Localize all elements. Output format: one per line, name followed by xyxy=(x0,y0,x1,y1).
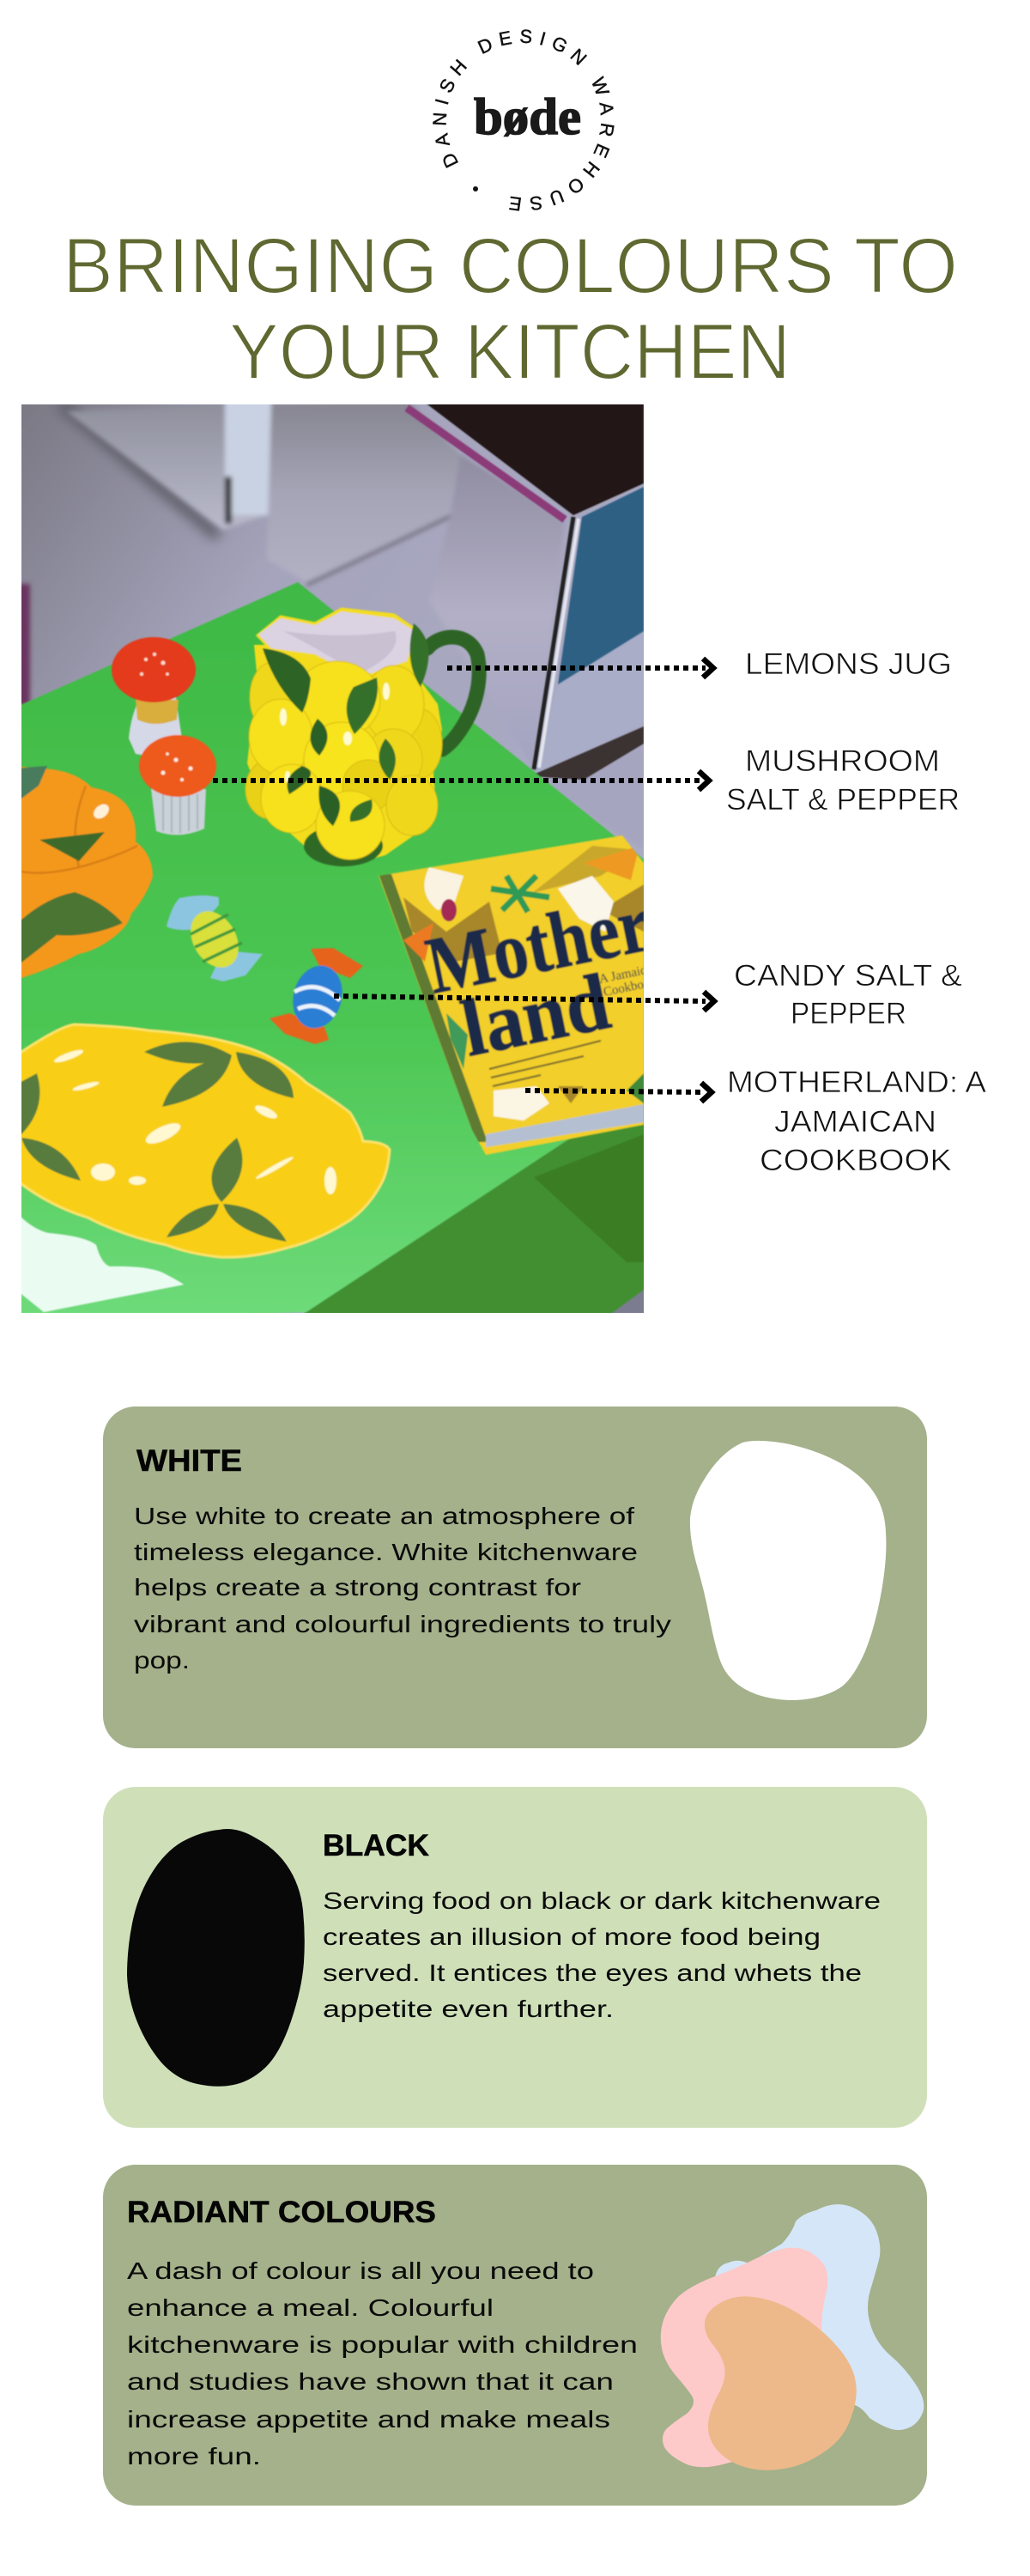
photo background: floor xyxy=(4,387,661,1330)
photo: green table xyxy=(21,581,644,1313)
label: mushroom salt and pepper: SALT & PEPPER xyxy=(726,783,960,817)
title: BRINGING COLOURS TO xyxy=(63,222,958,310)
logo separator dot xyxy=(473,186,478,191)
text: radiant colours description: kitchenware is popular with children xyxy=(127,2331,638,2358)
text: radiant colours description xyxy=(127,2257,638,2470)
jug handle xyxy=(427,637,479,750)
photo: candy salt and pepper xyxy=(167,896,363,1044)
jug body xyxy=(247,645,442,865)
photo: lemon plate xyxy=(13,1024,390,1257)
plate leaves xyxy=(144,1042,232,1064)
label: motherland cookbook: JAMAICAN xyxy=(774,1105,936,1139)
text: black description: creates an illusion of more food being xyxy=(323,1923,821,1950)
heading: black: BLACK xyxy=(323,1829,429,1862)
photo: dark cabinet and side panels xyxy=(407,399,644,780)
book title: land xyxy=(454,957,617,1074)
book title xyxy=(422,909,644,1058)
text: radiant colours description: more fun. xyxy=(127,2443,261,2470)
icon: colourful paint blobs xyxy=(661,2204,924,2470)
text: white description xyxy=(134,1503,671,1674)
logo: bøde danish design warehouse xyxy=(433,29,615,211)
book title: Mother xyxy=(419,878,657,1012)
title xyxy=(63,222,958,396)
heading: white: WHITE xyxy=(136,1444,242,1478)
photo: Motherland cookbook xyxy=(379,835,659,1155)
heading: radiant colours: RADIANT COLOURS xyxy=(127,2196,436,2229)
jug rim xyxy=(255,606,414,663)
panel: black xyxy=(103,1787,927,2128)
text: radiant colours description: increase appetite and make meals xyxy=(127,2406,610,2433)
photo: Motherland cookbook: A Jamaican xyxy=(598,961,659,987)
panel: radiant colours xyxy=(103,2165,927,2506)
text: white description: timeless elegance. White kitchenware xyxy=(134,1539,638,1565)
icon: black paint blob xyxy=(127,1829,305,2087)
text: radiant colours description: enhance a meal. Colourful xyxy=(127,2294,494,2321)
jug leaves xyxy=(263,648,311,713)
text: radiant colours description: A dash of colour is all you need to xyxy=(127,2257,594,2284)
logo wordmark: bøde xyxy=(474,88,581,145)
arrow: lemons jug xyxy=(447,659,713,677)
text: white description: Use white to create an atmosphere of xyxy=(134,1503,634,1529)
photo: colourful kitchenware on a green table xyxy=(21,404,644,1313)
text: white description: pop. xyxy=(134,1647,190,1674)
label: mushroom salt and pepper xyxy=(726,744,960,817)
label: candy salt and pepper xyxy=(734,959,962,1030)
text: white description: helps create a strong contrast for xyxy=(134,1574,581,1601)
label: candy salt and pepper: CANDY SALT & xyxy=(734,959,962,993)
icon: white paint blob xyxy=(690,1441,886,1700)
label: mushroom salt and pepper: MUSHROOM xyxy=(745,744,940,778)
label: lemons jug: LEMONS JUG xyxy=(745,647,952,681)
photo: mirrored boxes xyxy=(21,404,564,706)
arrow: candy salt and pepper xyxy=(334,992,714,1011)
label: motherland cookbook: COOKBOOK xyxy=(760,1144,952,1177)
text: black description: served. It entices the eyes and whets the xyxy=(323,1959,862,1986)
title: YOUR KITCHEN xyxy=(229,308,791,396)
photo: mushroom salt and pepper xyxy=(112,637,216,835)
arrow: mushroom salt and pepper xyxy=(213,771,709,790)
label: motherland cookbook: MOTHERLAND: A xyxy=(727,1066,987,1099)
label: candy salt and pepper: PEPPER xyxy=(791,997,906,1030)
photo: Motherland cookbook: Cookbook xyxy=(603,975,658,999)
panel: white xyxy=(103,1406,927,1748)
jug lemons xyxy=(249,663,269,716)
text: black description: appetite even further. xyxy=(323,1996,614,2022)
label: motherland cookbook xyxy=(727,1066,987,1177)
text: radiant colours description: and studies have shown that it can xyxy=(127,2368,614,2395)
circular logo text: DANISH DESIGN WAREHOUSE xyxy=(433,29,615,211)
text: white description: vibrant and colourful ingredients to truly xyxy=(134,1611,671,1637)
text: black description xyxy=(323,1887,881,2022)
arrow: motherland cookbook xyxy=(525,1083,712,1102)
photo: lemons jug xyxy=(245,609,479,866)
photo: orange plate xyxy=(13,766,153,978)
text: black description: Serving food on black or dark kitchenware xyxy=(323,1887,881,1914)
